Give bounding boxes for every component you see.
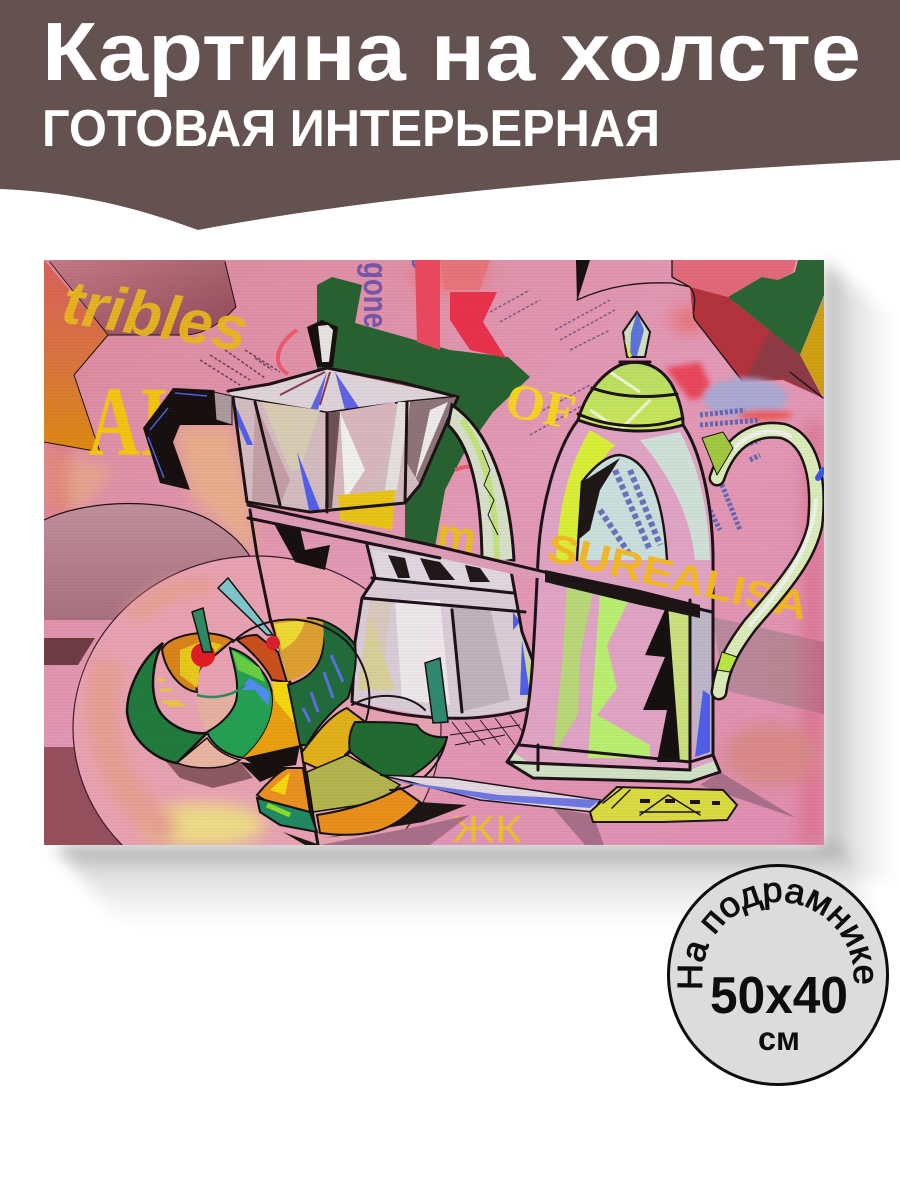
newsprint dashes <box>200 290 760 530</box>
badge curved label: На подрамнике <box>677 882 874 988</box>
left apple <box>127 608 273 768</box>
knife handle <box>590 787 737 822</box>
badge <box>667 864 889 1086</box>
apple shadows <box>163 758 470 845</box>
teapot handle <box>702 430 823 692</box>
hatched cast shadow <box>450 715 525 745</box>
pink background <box>44 260 824 845</box>
yellow word OF: OF <box>501 371 581 440</box>
subtitle: ГОТОВАЯ ИНТЕРЬЕРНАЯ <box>42 100 660 158</box>
purple word gone: gone <box>356 262 394 328</box>
moka pot lower body <box>352 545 543 720</box>
painted word tribles: tribles <box>58 268 252 365</box>
teapot body <box>507 420 720 782</box>
plate <box>72 555 442 845</box>
floor shadows right <box>553 772 796 845</box>
yellow word surrealism: SUREALISA <box>543 526 812 629</box>
dark table band <box>44 638 95 665</box>
teapot dome <box>578 362 683 431</box>
title: Картина на холсте <box>42 5 861 98</box>
table corner <box>44 747 122 845</box>
teapot finial <box>623 312 650 358</box>
canvas shadow <box>55 262 900 925</box>
badge circle <box>668 866 888 1084</box>
bottom apple <box>257 658 448 835</box>
canvas weave texture <box>44 260 824 845</box>
left orange shape <box>44 260 108 452</box>
teapot inner arch <box>577 455 667 560</box>
purple letter e: e <box>406 254 437 270</box>
brown half disc <box>44 504 255 620</box>
right apple <box>218 578 369 770</box>
coffee pot spout arc <box>448 405 514 565</box>
brown polygon top left <box>50 260 236 335</box>
yellow letter m: m <box>434 509 479 563</box>
diagonal band and vertical line <box>248 505 712 845</box>
peach washes <box>44 259 824 845</box>
moka pot upper body <box>233 397 458 530</box>
lower right brown band <box>713 617 824 714</box>
green angular shape <box>317 277 530 547</box>
badge size: 50x40 <box>710 967 848 1025</box>
header banner <box>0 0 900 230</box>
moka pot handle <box>143 388 232 490</box>
top right red green yellow shapes <box>576 260 824 398</box>
badge unit: см <box>758 1020 800 1057</box>
yellow script bottom: ЖК <box>452 809 522 851</box>
colour smudges right <box>665 362 793 420</box>
knife blade <box>380 775 600 812</box>
moka pot knob <box>307 320 338 367</box>
painted letters AI: AI <box>88 366 168 477</box>
red letter R strokes <box>278 260 506 470</box>
moka pot lid <box>228 368 458 413</box>
painting on canvas <box>44 254 824 900</box>
